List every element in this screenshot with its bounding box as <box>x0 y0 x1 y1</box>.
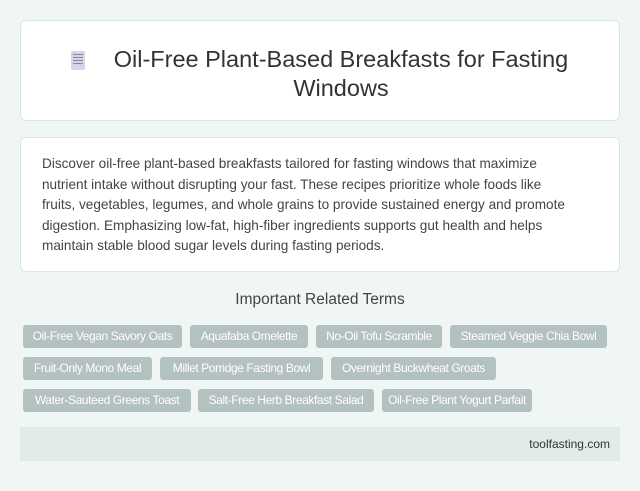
footer: toolfasting.com <box>529 437 610 451</box>
title: Oil-Free Plant-Based Breakfasts for Fasting Windows <box>114 46 568 101</box>
tags: No-Oil Tofu Scramble <box>326 329 432 343</box>
tags: Water-Sauteed Greens Toast <box>35 393 179 407</box>
title card <box>20 20 620 121</box>
icon: document <box>71 51 85 70</box>
related terms heading: Important Related Terms <box>235 291 405 308</box>
tags: Fruit-Only Mono Meal <box>34 361 141 375</box>
tags: Salt-Free Herb Breakfast Salad <box>209 393 363 407</box>
description text: Discover oil-free plant-based breakfasts tailored for fasting windows that maximize nutrient intake without disrupting your fast. These recipes prioritize whole foods like fruits, vegetables, legumes, and whole grains to provide sustained energy and promote digestion. Emphasizing low-fat, high-fiber ingredients supports gut health and helps maintain stable blood sugar levels during fasting periods. <box>42 156 565 253</box>
tags: Steamed Veggie Chia Bowl <box>461 329 596 343</box>
tags: Aquafaba Omelette <box>201 329 297 343</box>
footer <box>20 427 620 461</box>
tags: Oil-Free Vegan Savory Oats <box>33 329 172 343</box>
tags: Oil-Free Plant Yogurt Parfait <box>388 393 526 407</box>
tags: Overnight Buckwheat Groats <box>342 361 485 375</box>
description card <box>20 137 620 272</box>
tags: Millet Porridge Fasting Bowl <box>173 361 310 375</box>
